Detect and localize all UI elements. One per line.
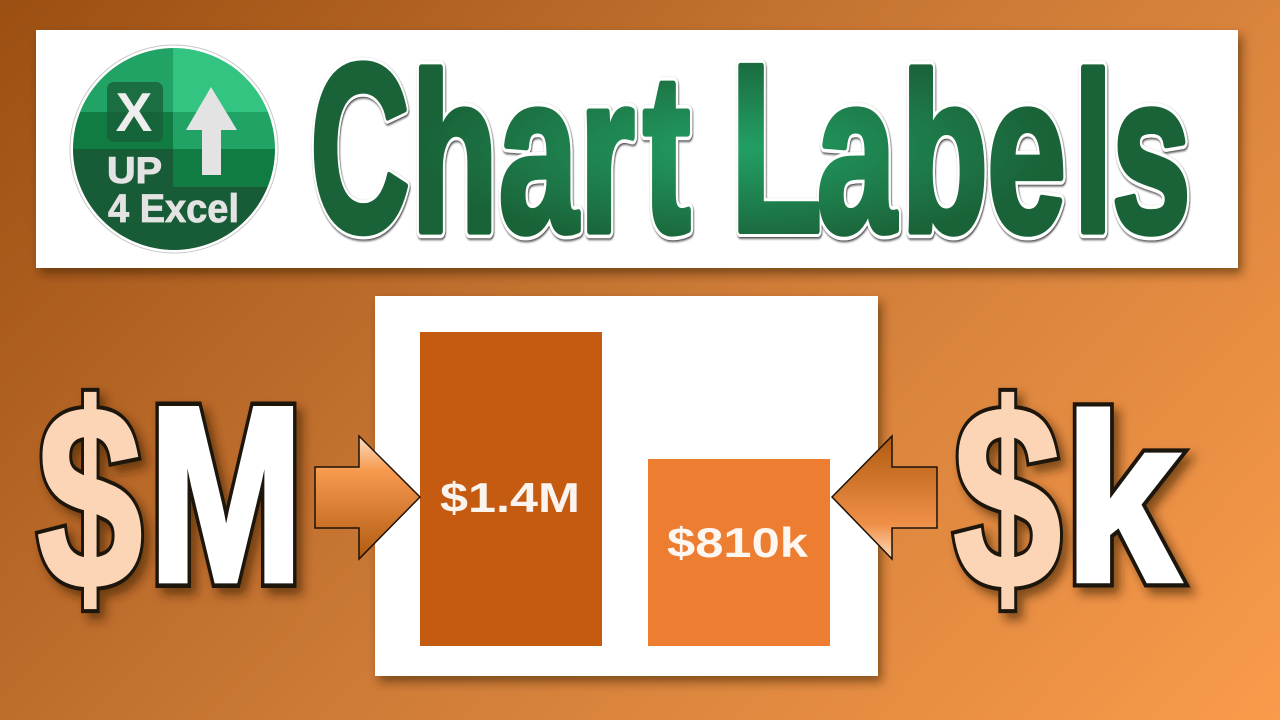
label: $k: k — [1065, 368, 1179, 630]
label: $M: M — [149, 357, 303, 633]
bar: $810k — [648, 459, 830, 646]
label: $k: $ — [953, 351, 1062, 644]
bar: $810k: $810k — [667, 519, 809, 566]
label: $k: $ — [953, 351, 1062, 644]
bar: $1.4M: $1.4M — [440, 474, 580, 521]
title banner — [36, 13, 1238, 282]
logo: UP 4 Excel — [70, 40, 278, 259]
logo: UP 4 Excel: X — [116, 81, 153, 143]
arrow: $M to bar — [315, 436, 420, 559]
label: $M: $ — [37, 352, 143, 644]
chart panel — [375, 296, 878, 676]
banner panel — [36, 30, 1238, 268]
label: $M: $ — [37, 352, 143, 644]
bar: $1.4M — [420, 332, 602, 646]
logo: UP 4 Excel: 4 Excel — [108, 187, 239, 231]
arrow: $k to bar — [832, 436, 937, 559]
label: $M: M — [149, 357, 303, 633]
heading: Chart Labels: Chart Labels — [310, 13, 1191, 282]
label: $k — [953, 351, 1179, 644]
heading: Chart Labels: Chart Labels — [310, 13, 1191, 282]
label: $M — [37, 352, 303, 644]
label: $k: k — [1065, 368, 1179, 630]
logo: UP 4 Excel: UP — [107, 150, 162, 191]
